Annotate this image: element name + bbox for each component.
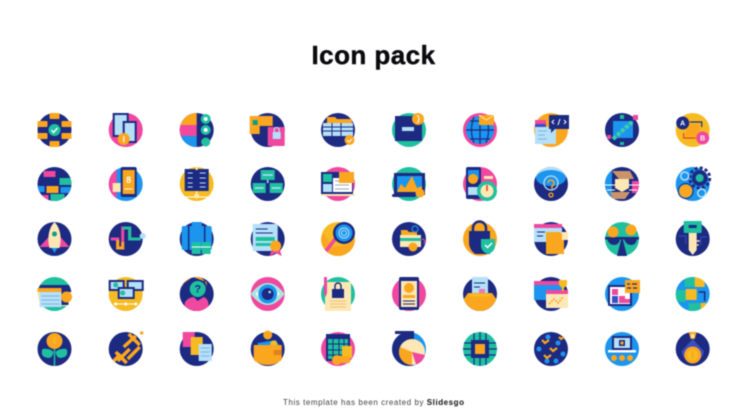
icon: documents and coin xyxy=(109,113,143,147)
icon: padlock and shield xyxy=(463,222,497,256)
icon: certificate with ribbon xyxy=(251,222,285,256)
icon: gold chain xyxy=(109,331,143,366)
title: Icon pack xyxy=(312,40,436,70)
icon: phone in hand with bitcoin: 8 xyxy=(126,175,131,185)
icon: A to B transfer: A xyxy=(680,120,685,128)
footer credit: This template has been created by Slidesgo xyxy=(283,398,464,407)
icon: globe with envelope xyxy=(463,113,497,147)
icon: hierarchy of boxes xyxy=(251,167,285,201)
icon: cloud with question mark xyxy=(534,164,568,201)
icon: connected screens xyxy=(109,277,144,311)
icon: monitor with SQL tag xyxy=(605,277,640,311)
icon: browser window and coin xyxy=(38,277,72,311)
icon: microchip xyxy=(463,332,497,366)
icon: A to B transfer: B xyxy=(700,136,705,142)
icon: phone with gauge xyxy=(463,167,497,201)
icon: laptop with star ratings xyxy=(605,332,639,366)
icon: A to B transfer xyxy=(676,113,710,147)
icon: database folder xyxy=(321,113,355,147)
icon: pipeline path xyxy=(109,222,146,256)
icon: rocket xyxy=(38,222,72,256)
icon: calculator and coins xyxy=(321,332,355,366)
icon: blockchain link xyxy=(605,113,639,147)
icon grid xyxy=(38,113,710,366)
icon: laptop with chart xyxy=(392,167,426,201)
icon: mobile payment xyxy=(392,277,426,311)
icon: database and pie chart xyxy=(392,331,426,366)
icon: fingerprint magnifier xyxy=(321,222,355,256)
icon: person with question mark xyxy=(180,276,214,311)
icon: balance scale with coins xyxy=(605,222,639,256)
icon: code speech bubble xyxy=(534,113,569,147)
icon: monitor and folder xyxy=(321,167,355,201)
icon: coin and leaves xyxy=(38,332,72,366)
icon: key xyxy=(676,221,710,256)
icon: paper from printer xyxy=(463,277,497,311)
icon: coloured blocks xyxy=(38,167,72,201)
icon: hanging coin xyxy=(676,332,710,366)
icon: map and browser window xyxy=(534,277,568,311)
icon: contract with lock xyxy=(321,277,355,311)
icon: gear and coin xyxy=(676,167,710,201)
icon: verification split xyxy=(180,113,214,147)
icon: suitcase with money xyxy=(180,222,214,256)
icon: code window and document xyxy=(534,222,568,256)
icon: phone in hand with bitcoin xyxy=(109,167,143,201)
icon: person with question mark: ? xyxy=(194,284,201,296)
icon: stacked notes xyxy=(180,332,214,366)
icon: puzzle lock xyxy=(250,113,285,147)
icon: handshake with envelope xyxy=(605,167,639,201)
icon: wallet and coins xyxy=(251,330,285,366)
icon: network with checks xyxy=(534,332,568,366)
icon: eye xyxy=(251,277,285,311)
icon: secure folder xyxy=(392,222,426,256)
icon: shield check network xyxy=(38,113,72,147)
icon: server rack xyxy=(180,167,214,201)
icon: safe and coin xyxy=(392,113,426,147)
icon: linked cards xyxy=(676,277,710,311)
